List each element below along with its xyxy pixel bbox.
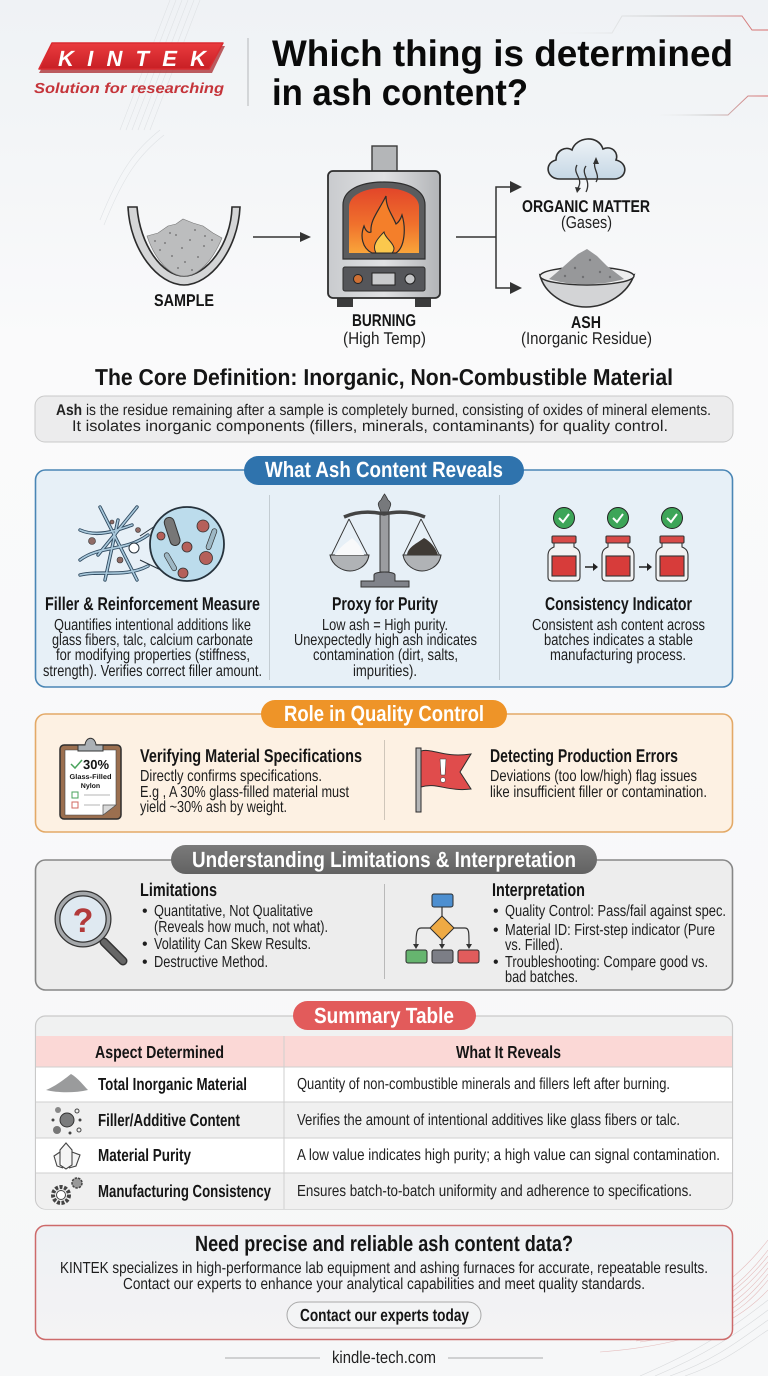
label: burning: (High Temp) <box>343 329 426 348</box>
logo: KINTEK: Solution for researching <box>34 81 224 97</box>
row: material purity: Material Purity <box>98 1145 191 1165</box>
column: proxy for purity: Proxy for Purity <box>332 593 439 614</box>
icon: cloud organic matter <box>522 139 650 232</box>
label: burning: BURNING <box>352 311 416 330</box>
label: sample: SAMPLE <box>154 291 214 310</box>
diagram: sample crucible <box>128 207 240 310</box>
column: consistency indicator <box>532 593 705 664</box>
title <box>272 33 733 113</box>
panel: role in quality control <box>36 700 732 832</box>
column: filler and reinforcement <box>43 593 262 680</box>
row: manufacturing consistency: Ensures batch-to-batch uniformity and adherence to specifications. <box>297 1183 692 1200</box>
block: limitations <box>140 879 328 971</box>
column: consistency indicator: batches indicates a stable <box>544 632 693 649</box>
block: interpretation <box>492 879 726 986</box>
icon: magnifier with question mark: ? <box>73 902 93 940</box>
column: filler and reinforcement: Filler & Reinforcement Measure <box>45 593 260 614</box>
title: Which thing is determined <box>272 33 733 74</box>
table header: Aspect Determined <box>95 1042 224 1062</box>
block: limitations: Destructive Method. <box>154 954 268 971</box>
panel: ash definition <box>35 396 733 442</box>
title: in ash content? <box>272 72 528 113</box>
button: contact experts: Contact our experts today <box>300 1305 469 1325</box>
column: filler and reinforcement: Quantifies intentional additions like <box>54 617 251 634</box>
heading: core definition: The Core Definition: Inorganic, Non-Combustible Material <box>95 364 673 390</box>
table header <box>95 1042 561 1062</box>
panel: summary table <box>36 1001 732 1209</box>
button: contact experts <box>287 1302 481 1328</box>
row: material purity <box>54 1143 720 1169</box>
icon: clipboard: 30% <box>83 757 109 772</box>
block: interpretation: Material ID: First-step indicator (Pure <box>505 922 715 939</box>
block: limitations: (Reveals how much, not what). <box>154 919 328 936</box>
arrow: branch to outputs <box>456 181 522 294</box>
panel: ash definition: Ash is the residue remaining after a sample is completely burned, consisting of oxides of mineral elements. <box>56 402 711 419</box>
icon: decision flowchart <box>406 894 479 963</box>
row: total inorganic material: Total Inorganic Material <box>98 1074 247 1094</box>
logo: KINTEK <box>34 43 225 97</box>
block: limitations: • <box>142 954 148 971</box>
block: detecting production errors: like insufficient filler or contamination. <box>490 784 707 801</box>
column: filler and reinforcement: glass fibers, talc, calcium carbonate <box>52 632 253 649</box>
block: detecting production errors: Detecting Production Errors <box>490 745 678 766</box>
diagram: furnace <box>328 146 440 348</box>
column: proxy for purity: contamination (dirt, salts, <box>313 647 458 664</box>
column: proxy for purity <box>294 593 477 680</box>
icon: ash bowl <box>521 249 652 348</box>
block: verifying material specifications: Verifying Material Specifications <box>140 745 362 766</box>
block: detecting production errors: Deviations (too low/high) flag issues <box>490 768 697 785</box>
label: organic matter <box>522 197 650 232</box>
block: interpretation: bad batches. <box>505 969 578 986</box>
block: interpretation: • <box>493 922 499 939</box>
panel: limitations and interpretation <box>36 845 732 990</box>
panel: ash definition: It isolates inorganic components (fillers, minerals, contaminants) for quality control. <box>72 418 668 435</box>
label: ash <box>521 313 652 348</box>
row: manufacturing consistency <box>53 1178 692 1203</box>
block: interpretation: • <box>493 954 499 971</box>
block: detecting production errors <box>490 745 707 801</box>
column: proxy for purity: Unexpectedly high ash indicates <box>294 632 477 649</box>
panel: call to action: Need precise and reliable ash content data? <box>195 1231 573 1256</box>
panel: what ash content reveals <box>36 456 732 687</box>
column: consistency indicator: Consistency Indicator <box>545 593 692 614</box>
label: burning <box>343 311 426 348</box>
table header: What It Reveals <box>456 1042 561 1062</box>
block: interpretation: • <box>493 903 499 920</box>
column: consistency indicator: manufacturing process. <box>550 647 686 664</box>
icon: balance scale <box>330 494 441 587</box>
icon: red flag <box>416 748 471 812</box>
block: verifying material specifications: yield ~30% ash by weight. <box>140 799 287 816</box>
block: limitations: Volatility Can Skew Results. <box>154 936 311 953</box>
logo: KINTEK: KINTEK <box>58 46 208 71</box>
block: interpretation: vs. Filled). <box>505 937 563 954</box>
block: verifying material specifications: E.g , A 30% glass-filled material must <box>140 784 349 801</box>
panel: call to action: Contact our experts to enhance your analytical capabilities and meet quality standards. <box>123 1276 645 1293</box>
arrow: sample to burning <box>253 232 311 242</box>
heading pill: summary table: Summary Table <box>314 1003 454 1028</box>
heading pill: understanding limitations: Understanding Limitations & Interpretation <box>192 847 576 872</box>
icon: clipboard: Glass-Filled <box>70 773 112 781</box>
row: filler additive content <box>52 1107 680 1134</box>
row: manufacturing consistency: Manufacturing Consistency <box>98 1181 271 1201</box>
label: ash: ASH <box>571 313 601 332</box>
icon: magnifier with question mark <box>58 894 123 961</box>
block: limitations: Limitations <box>140 879 217 900</box>
label: organic matter: (Gases) <box>561 213 612 232</box>
icon: clipboard: Nylon <box>81 782 100 790</box>
block: limitations: • <box>142 903 148 920</box>
block: limitations: Quantitative, Not Qualitative <box>154 903 313 920</box>
column: proxy for purity: Low ash = High purity. <box>322 617 448 634</box>
label: organic matter: ORGANIC MATTER <box>522 197 650 216</box>
icon: clipboard <box>60 738 121 819</box>
block: verifying material specifications <box>140 745 362 816</box>
block: interpretation: Interpretation <box>492 879 585 900</box>
footer: kindle-tech.com <box>332 1348 436 1367</box>
row: filler additive content: Verifies the amount of intentional additives like glass fibers or talc. <box>297 1112 680 1129</box>
panel: call to action <box>36 1226 732 1340</box>
row: total inorganic material: Quantity of non-combustible minerals and fillers left after burning. <box>297 1076 670 1093</box>
column: filler and reinforcement: strength). Verifies correct filler amount. <box>43 663 262 680</box>
block: limitations: • <box>142 936 148 953</box>
icon: three bottles with checks <box>548 508 688 581</box>
icon: fibers and magnifier <box>80 507 224 581</box>
column: proxy for purity: impurities). <box>353 663 417 680</box>
heading pill: role in quality control: Role in Quality Control <box>284 701 484 726</box>
column: filler and reinforcement: for modifying properties (stiffness, <box>56 647 250 664</box>
row: filler additive content: Filler/Additive Content <box>98 1110 240 1130</box>
row: total inorganic material <box>46 1074 670 1094</box>
block: interpretation: Troubleshooting: Compare good vs. <box>505 954 708 971</box>
label: ash: (Inorganic Residue) <box>521 329 652 348</box>
heading pill: what ash content reveals: What Ash Content Reveals <box>265 457 503 482</box>
column: consistency indicator: Consistent ash content across <box>532 617 705 634</box>
block: verifying material specifications: Directly confirms specifications. <box>140 768 322 785</box>
